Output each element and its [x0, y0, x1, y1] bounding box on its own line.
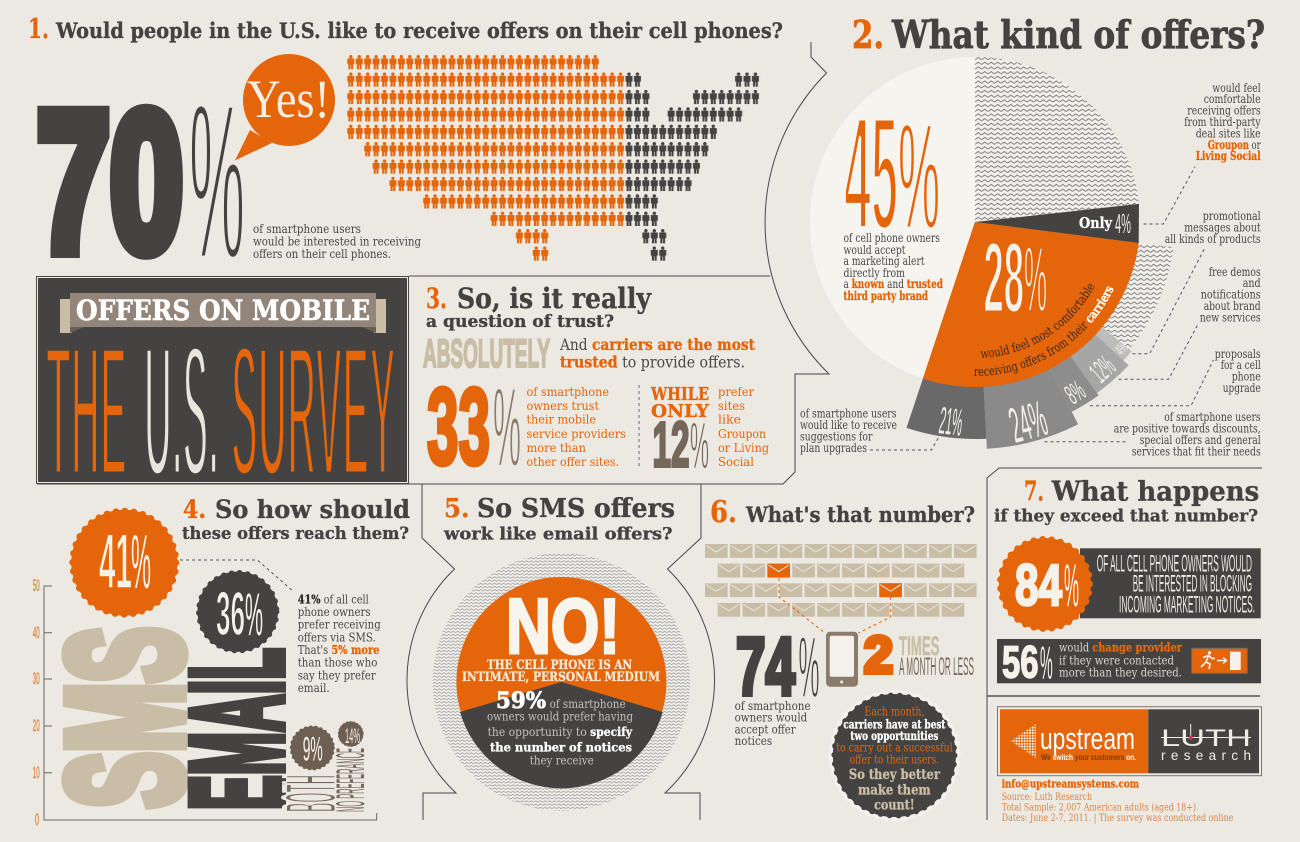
chart: offer types pie: [810, 57, 1174, 454]
panel: section 5 SMS vs email: [433, 494, 690, 811]
envelope grid: [705, 544, 977, 617]
text: plan upgrades: of smartphone users: [800, 406, 896, 421]
text: third-party deal sites: receiving offers: [1187, 102, 1261, 118]
text: 59 percent: 59%: [496, 688, 546, 714]
text: promotional messages: [1165, 208, 1261, 246]
badge: 14 percent: [338, 722, 363, 748]
text: 74 percent caption: [735, 698, 811, 748]
text: third-party deal sites: would feel: [1212, 80, 1261, 95]
panel: section 4 delivery channels: NO PREFERANCE: [329, 748, 373, 812]
text: %: [189, 58, 245, 306]
band: 56 percent: [997, 636, 1261, 688]
logo: Luth research: LUTH: [1161, 725, 1251, 752]
text: 74 percent caption: owners would: [735, 710, 807, 725]
text: free demos: about brand: [1204, 298, 1261, 313]
chart axis: 0: [35, 810, 39, 829]
heading: a question of trust?: [426, 312, 614, 332]
text: 59 percent: they receive: [530, 752, 594, 767]
title: the U.S. survey: THE: [46, 302, 127, 518]
text: third-party deal sites: deal sites like: [1196, 126, 1261, 140]
text: carriers curved caption: would feel most comfortable: [980, 284, 1094, 358]
callout: make them count: [829, 690, 959, 820]
band: 56 percent: if they were contacted: [1059, 652, 1174, 667]
stat: while only 12 percent: [650, 385, 710, 482]
stat: 2 times: [864, 626, 974, 684]
title: the U.S. survey: [48, 348, 394, 474]
text: promotional messages: promotional: [1203, 208, 1261, 223]
panel: section 3 trust: [423, 282, 769, 490]
badge: 9 percent: [291, 726, 334, 770]
text: 33 percent caption: service providers: [526, 426, 626, 441]
stat: while only 12 percent: 12: [652, 408, 690, 480]
chart: offer types pie: %: [1024, 229, 1047, 331]
badge: 36 percent: %: [245, 581, 263, 648]
text: 45 percent caption: of cell phone owners: [844, 230, 940, 245]
stat: while only 12 percent: ONLY: [651, 402, 710, 422]
slice: small chevrons: [975, 222, 1173, 349]
text: 41 percent caption: 41% of all cell: [298, 591, 369, 606]
text: 41 percent caption: [298, 591, 381, 695]
text: 33 percent caption: owners trust: [526, 398, 599, 413]
text: free demos: [1200, 264, 1261, 325]
disc: dark bottom: [460, 682, 663, 788]
heading: So, is it really: [457, 282, 652, 315]
heading: 3.: [426, 282, 447, 315]
band: 56 percent: more than they desired.: [1059, 665, 1182, 680]
band: 56 percent: %: [1040, 636, 1053, 688]
text: 59 percent: the number of notices: [490, 740, 632, 755]
heading: if they exceed that number?: [994, 507, 1258, 527]
callout: make them count: count!: [874, 797, 915, 813]
heading: [710, 495, 975, 530]
callout: make them count: So they better: [849, 767, 940, 783]
text: A MONTH OR LESS: [899, 653, 974, 681]
text: promotional messages: all kinds of products: [1165, 231, 1261, 246]
panel: section 4 delivery channels: BOTH: [269, 775, 354, 812]
panel: section 3 trust: ABSOLUTELY: [423, 332, 550, 376]
text: plan upgrades: would like to receive: [800, 417, 897, 432]
text: 70 percent caption: offers on their cell phones.: [253, 246, 391, 261]
stat: 28 percent: [984, 222, 1047, 334]
stat: 45 percent: [844, 81, 940, 265]
text: 33 percent caption: their mobile: [526, 412, 596, 426]
heading: [426, 282, 652, 332]
panel: section 3 trust: %: [690, 408, 709, 482]
chart axis: 40: [33, 623, 40, 642]
text: third-party deal sites: comfortable: [1204, 91, 1261, 106]
chart: offer types pie: 21%: [937, 400, 965, 445]
stat: 2 times: 2: [864, 626, 893, 684]
slice: 12 percent ring: [975, 222, 1129, 393]
text: sources: info@upstreamsystems.com: [1002, 778, 1139, 791]
heading: 7.: [1024, 477, 1044, 508]
heading: So how should: [215, 495, 410, 524]
text: cell phone upgrade proposals: upgrade: [1223, 380, 1261, 395]
panel: section 6 number of offers: [705, 495, 977, 820]
text: 41 percent caption: email.: [298, 680, 330, 695]
text: 59 percent: owners would prefer having: [487, 709, 633, 724]
text: intimate medium: [462, 658, 660, 685]
badge: 36 percent: [198, 572, 278, 652]
text: carriers most trusted: trusted to provide offers.: [560, 353, 745, 372]
heading: section 1: Would people in the U.S. like to receive offers on their cell phones?: [55, 18, 783, 43]
text: cell phone upgrade proposals: proposals: [1215, 346, 1261, 361]
text: carriers most trusted: [559, 335, 756, 372]
stat: 45 percent: 45: [844, 81, 898, 265]
ring: chevrons: [433, 553, 690, 811]
chart: offer types pie: 4%: [1115, 208, 1131, 239]
heading: 5.: [444, 494, 470, 524]
text: 33 percent caption: other offer sites.: [526, 454, 619, 469]
big stat: 70 percent: 70: [37, 71, 183, 292]
text: 12 percent caption: prefer: [718, 384, 754, 399]
headline: NO: NO!: [506, 582, 620, 670]
text: 45 percent caption: directly from: [844, 265, 905, 280]
stat: 2 times: TIMES: [899, 631, 940, 661]
logo: upstream: [1000, 709, 1148, 773]
chart axis: [33, 576, 377, 829]
text: discounts: special offers and general: [1140, 432, 1261, 447]
heading: 4.: [183, 495, 206, 524]
text: 33 percent caption: more than: [526, 440, 586, 455]
text: sources: [1002, 778, 1233, 824]
panel: section 6 number of offers: %: [798, 620, 820, 716]
speech bubble: Yes: Yes!: [247, 69, 330, 129]
heading: [182, 495, 410, 544]
text: 45 percent caption: would accept: [844, 242, 906, 257]
ribbon: OFFERS ON MOBILE: [76, 294, 370, 327]
slice: third party chevrons: [975, 57, 1139, 222]
logo: upstream: upstream: [1040, 721, 1135, 756]
label: small 4 percent: 4%: [1112, 340, 1131, 359]
text: intimate medium: INTIMATE, PERSONAL MEDIUM: [462, 670, 660, 685]
badge: 41 percent: 41: [99, 517, 132, 605]
heading: [443, 494, 675, 544]
text: sources: Dates: June 2-7, 2011. | The survey was conducted online: [1002, 813, 1233, 824]
callout: make them count: offer to their users.: [850, 752, 939, 767]
heading: section 1: 1.: [28, 14, 49, 45]
slice: 8 percent ring: [975, 222, 1099, 412]
label: 12 percent: 12%: [1084, 350, 1122, 389]
text: third-party deal sites: Living Social: [1196, 148, 1261, 163]
stat: only 4 percent: Only: [1079, 214, 1113, 232]
callout: make them count: two opportunities: [850, 729, 939, 743]
text: 33 percent caption: of smartphone: [526, 384, 609, 399]
slice: carriers orange: [923, 222, 1139, 387]
text: 41 percent caption: than those who: [298, 655, 377, 670]
text: 41 percent caption: prefer receiving: [298, 617, 381, 632]
chart: US map of people: [347, 55, 760, 261]
heading: work like email offers?: [443, 524, 673, 544]
heading: section 2: 2.: [852, 12, 884, 57]
slice: 21 percent ring: [906, 222, 986, 439]
text: 12 percent caption: sites: [718, 398, 745, 413]
text: 41 percent caption: phone owners: [298, 604, 371, 619]
text: intimate medium: THE CELL PHONE IS AN: [487, 658, 632, 673]
text: 45 percent caption: third party brand: [844, 288, 928, 303]
heading: 6.: [710, 495, 737, 530]
text: 74 percent caption: accept offer: [735, 721, 796, 736]
chart axis: 20: [33, 716, 40, 735]
chart axis: 10: [33, 763, 40, 782]
stat: 33 percent: 33: [427, 366, 490, 488]
text: 12 percent caption: [718, 384, 769, 469]
speech bubble: Yes: [235, 54, 335, 160]
panel: section 4 delivery channels: [33, 495, 410, 829]
text: 70 percent caption: of smartphone users: [253, 221, 361, 236]
callout: make them count: carriers have at best: [843, 717, 946, 731]
text: promotional messages: messages about: [1184, 220, 1261, 235]
badge: 41 percent: [71, 510, 177, 616]
text: 41 percent caption: say they prefer: [298, 667, 376, 682]
panel: logos: [998, 707, 1262, 776]
text: cell phone upgrade proposals: [1215, 346, 1261, 395]
text: third-party deal sites: Groupon or: [1208, 137, 1261, 152]
badge: 9 percent: 9%: [303, 731, 323, 769]
text: third-party deal sites: from third-party: [1184, 114, 1261, 129]
logo: Luth research: research: [1161, 748, 1251, 763]
text: carriers curved caption: receiving offers from their carriers: [974, 286, 1114, 376]
band: 56 percent: 56: [1002, 636, 1038, 688]
text: free demos: free demos: [1209, 264, 1261, 279]
chart axis: 50: [33, 576, 40, 595]
chart: offer types pie: 24%: [1003, 390, 1053, 454]
band: 84 percent: 84: [1015, 553, 1062, 618]
stat: 74 percent: 74: [736, 622, 795, 712]
badge: 36 percent: 36: [216, 580, 245, 649]
text: 59 percent: the opportunity to specify: [488, 724, 633, 739]
stat: only 4 percent: [1079, 208, 1131, 239]
text: cell phone upgrade proposals: for a cell: [1221, 357, 1261, 372]
heading: What happens: [1051, 477, 1259, 508]
text: 12 percent caption: or Living: [718, 440, 769, 455]
text: free demos: new services: [1200, 310, 1261, 325]
heading: What's that number?: [745, 502, 975, 527]
text: 45 percent caption: [844, 230, 943, 303]
text: free demos: notifications: [1201, 287, 1261, 302]
text: sources: Total Sample: 2,007 American adults (aged 18+).: [1002, 803, 1198, 814]
badge: 41 percent: %: [131, 520, 151, 605]
text: 12 percent caption: Social: [718, 454, 754, 469]
text: carriers most trusted: And carriers are the most: [559, 335, 756, 354]
icon: phone: [826, 632, 858, 687]
disc: orange top: [456, 577, 666, 787]
band: 84 percent: %: [1064, 552, 1079, 619]
panel: section 3 trust: %: [493, 365, 521, 490]
text: 41 percent caption: offers via SMS.: [298, 629, 376, 644]
text: 59 percent: [487, 688, 633, 767]
logo: Luth research: [1148, 709, 1259, 773]
callout: make them count: to carry out a successful: [836, 740, 953, 755]
text: 12 percent caption: like: [718, 412, 741, 426]
slice: 4 percent ring: [975, 222, 1132, 360]
text: sources: Source: Luth Research: [1002, 792, 1092, 803]
panel: section 4 delivery channels: 14%: [345, 725, 360, 748]
text: 70 percent caption: would be interested in receiving: [253, 234, 421, 248]
chart axis: 30: [33, 669, 40, 688]
text: 45 percent caption: a known and trusted: [844, 276, 943, 291]
text: 74 percent caption: notices: [735, 733, 772, 748]
panel: section 4 delivery channels: EMAIL: [164, 648, 310, 810]
band: 56 percent: would change provider: [1059, 640, 1182, 655]
callout: make them count: make them: [858, 782, 931, 798]
panel: title box: [36, 276, 409, 484]
chart: offer types pie: %: [898, 92, 940, 260]
logo: upstream: We switch your customers on.: [1041, 753, 1136, 762]
text: plan upgrades: suggestions for: [800, 429, 872, 444]
slice: 45 percent white: [810, 57, 975, 379]
text: plan upgrades: [800, 406, 897, 455]
title: the U.S. survey: U.S.: [144, 302, 219, 518]
heading: these offers reach them?: [182, 524, 409, 544]
text: SURVEY: [231, 302, 396, 518]
text: 70 percent caption: [253, 221, 421, 261]
slice: 24 percent ring: [975, 222, 1078, 449]
text: 59 percent: of smartphone: [550, 696, 626, 711]
text: third-party deal sites: [1184, 80, 1261, 163]
text: discounts: of smartphone users: [1164, 409, 1261, 424]
stat: while only 12 percent: WHILE: [650, 385, 709, 405]
text: 45 percent caption: a marketing alert: [844, 253, 924, 268]
label: 8 percent: 8%: [1059, 375, 1091, 410]
band: 84 percent: [999, 538, 1261, 630]
icon: exit sign: [1192, 648, 1247, 673]
bar: SMS: SMS: [35, 627, 214, 808]
text: 12 percent caption: Groupon: [718, 426, 766, 441]
stat: 28 percent: 28: [984, 222, 1024, 334]
text: 74 percent caption: of smartphone: [735, 698, 811, 713]
text: plan upgrades: plan upgrades: [800, 440, 867, 455]
panel: section 7 exceeding the number: [994, 477, 1261, 688]
text: free demos: and: [1243, 275, 1261, 290]
heading: [994, 477, 1259, 527]
slice: only 4 percent dark: [975, 204, 1139, 243]
text: cell phone upgrade proposals: phone: [1232, 369, 1261, 384]
text: 41 percent caption: That's 5% more: [298, 642, 379, 657]
callout: make them count: Each month,: [864, 704, 924, 719]
heading: So SMS offers: [477, 494, 675, 524]
text: discounts: [1114, 409, 1261, 458]
text: 33 percent caption: [526, 384, 626, 469]
